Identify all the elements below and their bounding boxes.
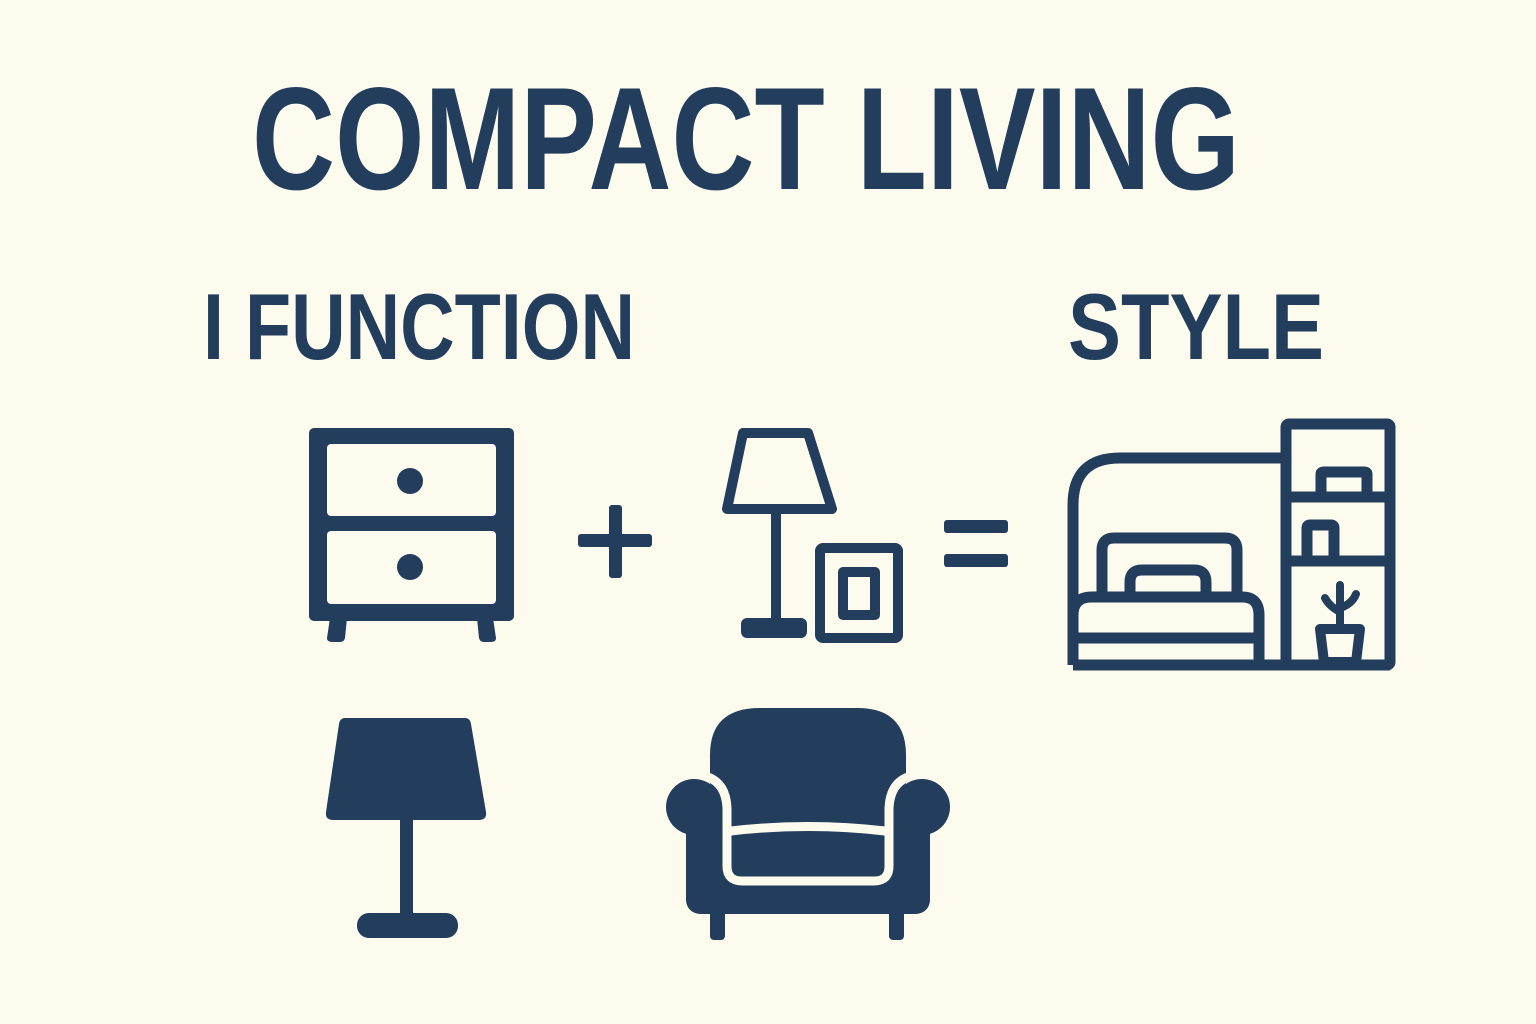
icon: table lamp: [326, 718, 486, 938]
heading: style: STYLE: [1068, 274, 1324, 379]
icon: equals: [944, 520, 1008, 567]
icon: bed with shelf: [1073, 424, 1390, 665]
icon: lamp and frame: [727, 433, 898, 638]
icon: plus: [578, 505, 652, 578]
title: COMPACT LIVING: [252, 57, 1240, 220]
icon: armchair: [666, 708, 950, 940]
icon: nightstand: [309, 428, 514, 642]
heading: function: I FUNCTION: [203, 274, 635, 379]
